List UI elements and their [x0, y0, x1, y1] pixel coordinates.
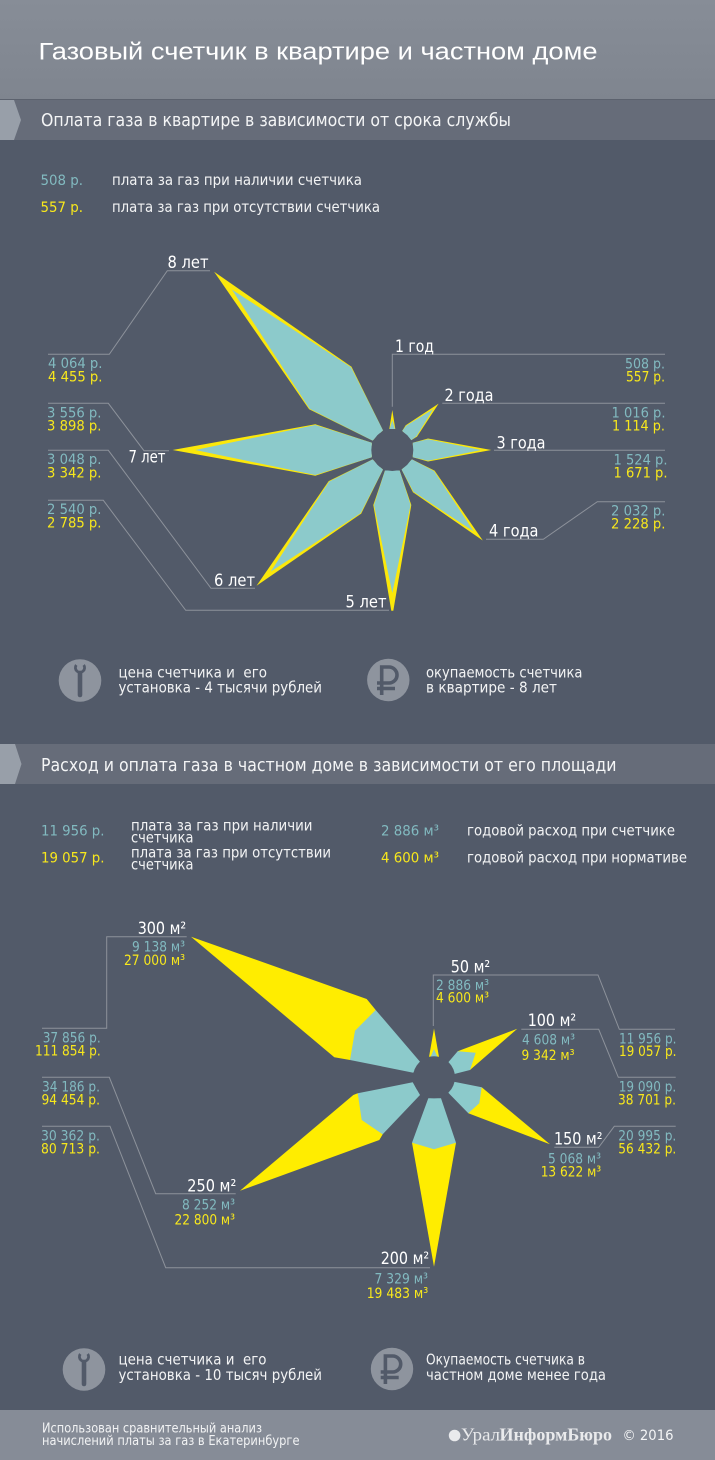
callout: 300 m2 [35, 919, 187, 1059]
callout: 50 m2: 4 600 м³ [436, 991, 489, 1007]
callout: 4 years: 2 032 р. [611, 504, 666, 520]
callout: 250 m2: 22 800 м³ [174, 1212, 235, 1228]
callout: 100 m2: 9 342 м³ [522, 1048, 575, 1064]
callout: 2 years: 2 года [444, 386, 494, 406]
footer [0, 1410, 715, 1460]
note: meter price (house) [118, 1351, 322, 1384]
petal: 6 years [240, 448, 394, 602]
note: payback (apartment): окупаемость счетчика [426, 663, 582, 681]
note: payback (house): частном доме менее года [426, 1366, 606, 1384]
petal: 2 years [401, 398, 444, 441]
note: meter price (apartment) [118, 663, 322, 697]
callout: 150 m2: 20 995 р. [618, 1128, 676, 1144]
callout: 200 m2: 7 329 м³ [374, 1271, 428, 1287]
callout: 2 years: 1 016 р. [612, 405, 666, 421]
petal: 7 years [173, 424, 372, 476]
callout: 3 years [494, 433, 668, 482]
callout: 4 years: 4 года [489, 522, 538, 542]
callout: 100 m2: 4 608 м³ [522, 1032, 575, 1048]
callout: 300 m2: 9 138 м³ [132, 939, 185, 955]
callout: 7 years [47, 403, 169, 467]
callout: 4 years [486, 502, 666, 542]
title banner: Газовый счетчик в квартире и частном доме [38, 38, 598, 66]
callout: 300 m2: 300 м² [138, 919, 186, 939]
legend: apartment: 557 р. [40, 200, 83, 216]
callout: 150 m2: 56 432 р. [618, 1141, 676, 1157]
callout: 150 m2: 13 622 м³ [541, 1165, 601, 1181]
petal: 200 m2 [412, 1098, 456, 1267]
callout: 150 m2: 150 м² [554, 1130, 602, 1150]
callout: 6 years: 6 лет [214, 571, 255, 591]
petal: 1 year [389, 410, 395, 429]
callout: 3 years: 3 года [496, 433, 546, 453]
note: meter price (house): установка - 10 тысяч рублей [118, 1366, 322, 1384]
callout: 200 m2 [41, 1126, 430, 1302]
callout: 250 m2 [42, 1077, 236, 1228]
callout: 6 years: 3 342 р. [47, 465, 102, 481]
note: payback (apartment) [426, 663, 582, 697]
chart hub [371, 429, 413, 471]
callout: 50 m2: 11 956 р. [619, 1031, 676, 1047]
legend: apartment: плата за газ при отсутствии счетчика [112, 198, 380, 216]
callout: 300 m2: 27 000 м³ [124, 953, 185, 969]
callout: 50 m2: 50 м² [451, 958, 490, 978]
icon: wrench (apartment) [59, 659, 101, 702]
legend: house payment: плата за газ при наличии [131, 817, 312, 835]
section header: apartment: Оплата газа в квартире в зависимости от срока службы [41, 111, 511, 131]
chart hub [413, 1056, 455, 1098]
callout: 1 year: 1 год [395, 337, 434, 357]
callout: 4 years: 2 228 р. [611, 516, 666, 532]
legend: apartment [40, 171, 380, 216]
logo: Урал [461, 1425, 500, 1445]
icon: ruble (house) [371, 1348, 413, 1390]
callout: 5 years: 5 лет [346, 593, 387, 613]
callout: 50 m2: 19 057 р. [619, 1044, 676, 1060]
callout: 150 m2 [541, 1126, 676, 1181]
section header: private house: Расход и оплата газа в частном доме в зависимости от его площади [41, 756, 616, 776]
callout: 5 years: 2 540 р. [47, 502, 102, 518]
icon: wrench (house) [63, 1348, 105, 1391]
callout: 100 m2: 19 090 р. [619, 1079, 676, 1095]
petal: 5 years [373, 470, 411, 611]
callout: 200 m2: 200 м² [381, 1249, 429, 1269]
legend: house payment: плата за газ при отсутствии [131, 843, 331, 861]
footer note: Использован сравнительный анализ [42, 1421, 262, 1436]
legend: apartment: 508 р. [40, 173, 83, 189]
section header: apartment [0, 99, 715, 140]
callout: 100 m2: 38 701 р. [618, 1092, 676, 1108]
callout: 150 m2: 5 068 м³ [548, 1151, 601, 1167]
legend: house consumption: годовой расход при нормативе [467, 849, 687, 867]
callout: 7 years: 3 898 р. [47, 418, 102, 434]
callout: 1 year [392, 337, 665, 407]
callout: 6 years: 3 048 р. [47, 452, 102, 468]
chart: apartment star by years of service [173, 251, 494, 611]
section header: private house [0, 744, 715, 784]
petal: 3 years [413, 438, 491, 462]
callout: 200 m2: 19 483 м³ [367, 1286, 428, 1302]
callout: 250 m2: 8 252 м³ [182, 1197, 235, 1213]
callout: 1 year: 508 р. [625, 356, 665, 372]
note: payback (house): Окупаемость счетчика в [426, 1351, 585, 1369]
callout: 3 years: 1 524 р. [614, 452, 668, 468]
callout: 8 years: 4 064 р. [48, 356, 102, 372]
note: payback (house) [426, 1351, 606, 1384]
callout: 100 m2: 100 м² [528, 1011, 576, 1031]
callout: 250 m2: 250 м² [187, 1177, 236, 1197]
logo: ИнформБюро [500, 1425, 612, 1445]
callout: 50 m2 [433, 958, 676, 1060]
callout: 250 m2: 94 454 р. [42, 1092, 100, 1108]
footer note: начислений платы за газ в Екатеринбурге [42, 1434, 300, 1449]
callout: 6 years [47, 450, 255, 591]
note: meter price (apartment): установка - 4 тысячи рублей [118, 679, 322, 697]
title banner [0, 0, 715, 99]
petal: 100 m2 [448, 1029, 517, 1074]
legend: house payment: счетчика [131, 829, 194, 847]
callout: 100 m2 [521, 1011, 676, 1108]
legend: house consumption: 4 600 м³ [381, 851, 439, 867]
legend: house consumption [381, 822, 687, 867]
note: meter price (house): цена счетчика и его [118, 1351, 266, 1369]
callout: 7 years: 7 лет [128, 447, 166, 467]
chart: house star by area [191, 937, 550, 1267]
legend: house consumption: годовой расход при счетчике [467, 822, 675, 840]
legend: house payment: 19 057 р. [41, 851, 104, 867]
note: payback (apartment): в квартире - 8 лет [426, 679, 557, 697]
callout: 7 years: 3 556 р. [47, 405, 102, 421]
note: meter price (apartment): цена счетчика и его [118, 663, 267, 681]
callout: 8 years: 4 455 р. [48, 370, 102, 386]
callout: 50 m2: 2 886 м³ [436, 978, 489, 994]
legend: house payment: 11 956 р. [41, 824, 104, 840]
callout: 300 m2: 37 856 р. [43, 1030, 101, 1046]
callout: 8 years: 8 лет [168, 253, 209, 273]
logo [449, 1425, 612, 1445]
callout: 3 years: 1 671 р. [614, 466, 668, 482]
callout: 250 m2: 34 186 р. [42, 1079, 100, 1095]
callout: 8 years [48, 253, 210, 386]
footer note [42, 1421, 300, 1449]
petal: 250 m2 [240, 1082, 420, 1191]
legend: house payment: счетчика [131, 855, 194, 873]
callout: 200 m2: 30 362 р. [41, 1128, 100, 1144]
callout: 2 years: 1 114 р. [612, 419, 665, 435]
copyright: © 2016 [622, 1428, 674, 1444]
legend: apartment: плата за газ при наличии счетчика [112, 171, 362, 189]
callout: 300 m2: 111 854 р. [35, 1043, 101, 1059]
petal: 50 m2 [429, 1028, 439, 1057]
callout: 5 years: 2 785 р. [47, 515, 102, 531]
petal: 8 years [193, 251, 399, 457]
petal: 150 m2 [448, 1082, 550, 1144]
callout: 1 year: 557 р. [626, 370, 665, 386]
callout: 2 years [442, 386, 666, 435]
legend: house payment [41, 817, 331, 873]
petal: 300 m2 [191, 937, 420, 1073]
petal: 4 years [396, 454, 494, 551]
callout: 5 years [47, 500, 389, 613]
callout: 200 m2: 80 713 р. [41, 1141, 100, 1157]
legend: house consumption: 2 886 м³ [381, 824, 439, 840]
icon: ruble (apartment) [367, 659, 409, 701]
